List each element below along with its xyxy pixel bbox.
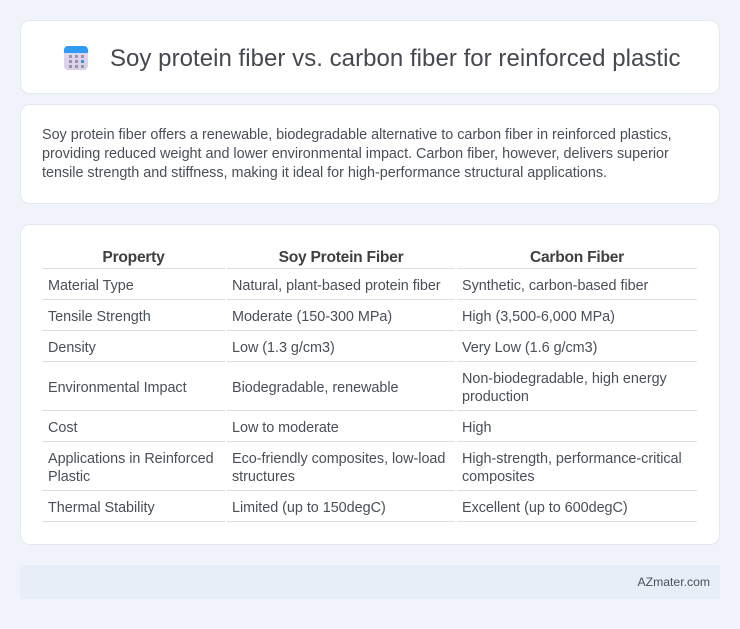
footer source text: AZmater.com [638, 575, 710, 589]
row: thermal stability: Limited (up to 150degC) [232, 500, 386, 516]
panel: comparison table [20, 224, 720, 545]
row: applications in reinforced plastic: Applications in Reinforced [48, 451, 214, 467]
row: cost: Cost [48, 420, 77, 436]
title: Soy protein fiber vs. carbon fiber for reinforced plastic [110, 45, 681, 72]
row: material type: Natural, plant-based protein fiber [232, 278, 441, 294]
header row: Soy Protein Fiber [279, 249, 403, 266]
summary paragraph: Soy protein fiber offers a renewable, biodegradable alternative to carbon fiber in reinforced plastics, [42, 127, 672, 143]
row: environmental impact: production [462, 389, 529, 405]
row: tensile strength: High (3,500-6,000 MPa) [462, 309, 615, 325]
icon: calendar [64, 46, 88, 70]
row: applications in reinforced plastic: Plastic [48, 469, 90, 485]
row: density: Density [48, 340, 96, 356]
row: material type: Material Type [48, 278, 134, 294]
row: thermal stability: Thermal Stability [48, 500, 155, 516]
row: applications in reinforced plastic: composites [462, 469, 534, 485]
summary paragraph [42, 127, 672, 181]
row: density [48, 340, 597, 356]
panel: summary text [20, 104, 720, 204]
row: material type [48, 278, 648, 294]
row: material type: Synthetic, carbon-based fiber [462, 278, 648, 294]
row: tensile strength: Tensile Strength [48, 309, 151, 325]
row: environmental impact: Biodegradable, renewable [232, 380, 398, 396]
header row [102, 249, 624, 266]
row: tensile strength [48, 309, 615, 325]
summary paragraph: tensile strength and stiffness, making it ideal for high-performance structural applications. [42, 165, 607, 181]
row: cost [48, 420, 491, 436]
header row: Carbon Fiber [530, 249, 624, 266]
row: tensile strength: Moderate (150-300 MPa) [232, 309, 392, 325]
footer bar [20, 565, 720, 599]
row: thermal stability: Excellent (up to 600degC) [462, 500, 628, 516]
row: applications in reinforced plastic: High-strength, performance-critical [462, 451, 682, 467]
row: applications in reinforced plastic [48, 451, 682, 485]
row: applications in reinforced plastic: Eco-friendly composites, low-load [232, 451, 445, 467]
row: environmental impact: Non-biodegradable, high energy [462, 371, 667, 387]
row: cost: Low to moderate [232, 420, 339, 436]
row: environmental impact [48, 371, 667, 405]
row: environmental impact: Environmental Impact [48, 380, 187, 396]
row: cost: High [462, 420, 491, 436]
row: density: Very Low (1.6 g/cm3) [462, 340, 597, 356]
header row: Property [102, 249, 165, 266]
row: applications in reinforced plastic: structures [232, 469, 295, 485]
row: thermal stability [48, 500, 628, 516]
title panel [20, 20, 720, 94]
row: density: Low (1.3 g/cm3) [232, 340, 335, 356]
summary paragraph: providing reduced weight and lower environmental impact. Carbon fiber, however, delivers superior [42, 146, 669, 162]
